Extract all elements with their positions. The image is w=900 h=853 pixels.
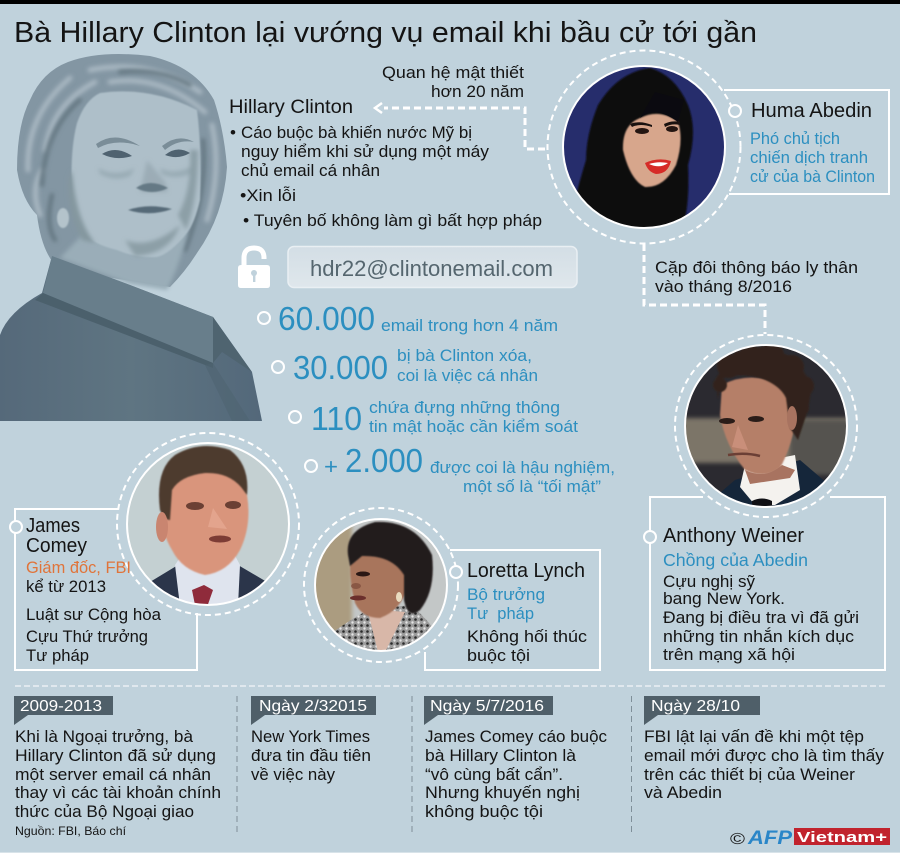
timeline: Ngày 5/7/2016: không buộc tội [425, 802, 543, 821]
timeline: Ngày 28/10: Ngày 28/10 [651, 698, 740, 715]
stat: 110: 110 [311, 400, 362, 437]
stat: + 2.000: + [324, 454, 338, 479]
stat: 110 [289, 398, 578, 437]
stat: 110: chứa đựng những thông [369, 398, 560, 417]
text: Hillary Clinton: chủ email cá nhân [241, 161, 380, 180]
jacket [0, 256, 262, 421]
text: Hillary Clinton: nguy hiểm khi sử dụng một máy [241, 142, 490, 161]
text: couple note: Cặp đôi thông báo ly thân [655, 258, 858, 277]
timeline: Ngày 5/7/2016: “vô cùng bất cẩn”. [425, 765, 563, 784]
timeline: Ngày 2/32015: Ngày 2/32015 [259, 698, 367, 715]
photo: Huma Abedin [560, 60, 730, 232]
panel: James Comey: kể từ 2013 [26, 577, 106, 596]
timeline: 2009-2013: Khi là Ngoại trưởng, bà [15, 727, 194, 746]
stat: 60.000: 60.000 [278, 300, 375, 337]
panel: James Comey: Comey [26, 535, 87, 557]
stat: 30.000: 30.000 [293, 349, 388, 386]
panel: Loretta Lynch: Tư pháp [467, 604, 534, 623]
stat: 30.000 [272, 346, 538, 386]
stat: 30.000: bị bà Clinton xóa, [397, 346, 532, 365]
face [72, 91, 201, 257]
panel: Anthony Weiner: Chồng của Abedin [663, 550, 808, 570]
timeline: Ngày 28/10: FBI lật lại vấn đề khi một tệp [644, 727, 864, 746]
text: Hillary Clinton: • Tuyên bố không làm gì bất hợp pháp [243, 211, 542, 230]
title: Bà Hillary Clinton lại vướng vụ email khi bầu cử tới gần [14, 17, 757, 49]
panel: Huma Abedin: cử của bà Clinton [750, 167, 875, 186]
eyebrows [96, 137, 140, 148]
panel: Loretta Lynch: buộc tội [467, 646, 530, 665]
face shadows [68, 150, 198, 256]
text: Hillary Clinton: Cáo buộc bà khiến nước Mỹ bị [241, 123, 472, 142]
logo: AFP Vietnam+: © [730, 831, 745, 848]
panel: James Comey [10, 433, 300, 670]
stat: + 2.000: một số là “tối mật” [463, 477, 601, 496]
panel: Anthony Weiner: bang New York. [663, 589, 785, 608]
nose [136, 183, 168, 192]
panel: Anthony Weiner: Đang bị điều tra vì đã gửi [663, 608, 859, 627]
stat: + 2.000: được coi là hậu nghiệm, [430, 458, 615, 477]
mouth [128, 206, 172, 213]
timeline: Ngày 28/10 [644, 696, 885, 802]
timeline: Ngày 28/10: email mới được cho là tìm thấy [644, 746, 885, 765]
ear [57, 208, 69, 228]
panel: Loretta Lynch: Loretta Lynch [467, 560, 585, 582]
stat: 110: tin mật hoặc cần kiểm soát [369, 417, 578, 436]
timeline: Ngày 5/7/2016: James Comey cáo buộc [425, 727, 607, 746]
timeline: Ngày 5/7/2016: Nhưng khuyến nghị [425, 783, 580, 802]
text: Hillary Clinton: • [230, 123, 236, 142]
panel: Huma Abedin: chiến dịch tranh [750, 148, 868, 167]
timeline: 2009-2013: thức của Bộ Ngoại giao [15, 802, 194, 821]
panel: Anthony Weiner: Cựu nghị sỹ [663, 572, 755, 591]
text: relationship note: hơn 20 năm [431, 82, 524, 101]
timeline: 2009-2013: một server email cá nhân [15, 765, 211, 784]
timeline: Ngày 5/7/2016: Ngày 5/7/2016 [430, 698, 544, 715]
text: Hillary Clinton: •Xin lỗi [240, 186, 296, 205]
panel: Loretta Lynch: Không hối thúc [467, 627, 588, 646]
timeline: 2009-2013 [14, 696, 221, 821]
stat: + 2.000 [305, 442, 615, 496]
timeline: Ngày 2/32015: đưa tin đầu tiên [251, 746, 371, 765]
timeline: Ngày 2/32015 [251, 696, 376, 784]
panel: James Comey: Cựu Thứ trưởng [26, 627, 148, 646]
arrow: Huma to Hillary [375, 103, 545, 149]
icon: open padlock [238, 248, 270, 288]
timeline: Ngày 2/32015: New York Times [251, 727, 370, 746]
stat: 30.000: coi là việc cá nhân [397, 366, 538, 385]
panel: James Comey: Luật sư Cộng hòa [26, 605, 162, 624]
logo: AFP Vietnam+ [730, 828, 890, 849]
email address box: hdr22@clintonemail.com [310, 256, 553, 281]
timeline: Ngày 2/32015: về việc này [251, 765, 335, 784]
text: couple note [655, 258, 858, 296]
eyes [102, 150, 132, 158]
panel: Loretta Lynch [304, 508, 600, 670]
collar [43, 256, 213, 363]
stat: + 2.000: 2.000 [345, 442, 423, 479]
timeline: Ngày 28/10: trên các thiết bị của Weiner [644, 765, 855, 784]
neck [60, 232, 187, 290]
panel: Huma Abedin: Phó chủ tịch [750, 129, 840, 148]
timeline: 2009-2013: thay vì các tài khoản chính [15, 783, 221, 802]
text: relationship note [382, 63, 524, 101]
panel: Huma Abedin [548, 50, 889, 244]
timeline: 2009-2013: Hillary Clinton đã sử dụng [15, 746, 216, 765]
panel: Anthony Weiner: Anthony Weiner [663, 525, 804, 547]
photo: Loretta Lynch [314, 518, 448, 652]
photo: James Comey [126, 442, 290, 606]
text: couple note: vào tháng 8/2016 [655, 277, 792, 296]
panel: Anthony Weiner: những tin nhắn kích dục [663, 627, 855, 646]
panel: Anthony Weiner: trên mạng xã hội [663, 645, 795, 664]
stat: 60.000 [258, 300, 558, 337]
panel: Huma Abedin: Huma Abedin [751, 100, 872, 122]
source note: Nguồn: FBI, Báo chí [15, 824, 127, 838]
panel: Loretta Lynch: Bộ trưởng [467, 585, 545, 604]
panel: Anthony Weiner [644, 335, 885, 670]
timeline: 2009-2013: 2009-2013 [20, 698, 102, 715]
timeline: Ngày 28/10: và Abedin [644, 783, 722, 802]
panel: James Comey: Giám đốc, FBI [26, 558, 131, 577]
panel: James Comey: James [26, 515, 80, 537]
timeline: Ngày 5/7/2016 [424, 696, 607, 821]
text: Hillary Clinton: Hillary Clinton [229, 97, 353, 118]
panel: James Comey: Tư pháp [26, 646, 89, 665]
text: relationship note: Quan hệ mật thiết [382, 63, 524, 82]
logo: AFP Vietnam+: Vietnam+ [797, 829, 887, 846]
hair [17, 54, 227, 287]
logo: AFP Vietnam+: AFP [747, 828, 792, 849]
portrait: Hillary Clinton [0, 40, 262, 421]
text: Hillary Clinton [229, 97, 542, 230]
timeline: Ngày 5/7/2016: bà Hillary Clinton là [425, 746, 577, 765]
email address box [288, 246, 577, 288]
connector: Huma to Weiner [644, 244, 765, 334]
photo: Anthony Weiner [684, 344, 848, 508]
stat: 60.000: email trong hơn 4 năm [381, 316, 558, 335]
